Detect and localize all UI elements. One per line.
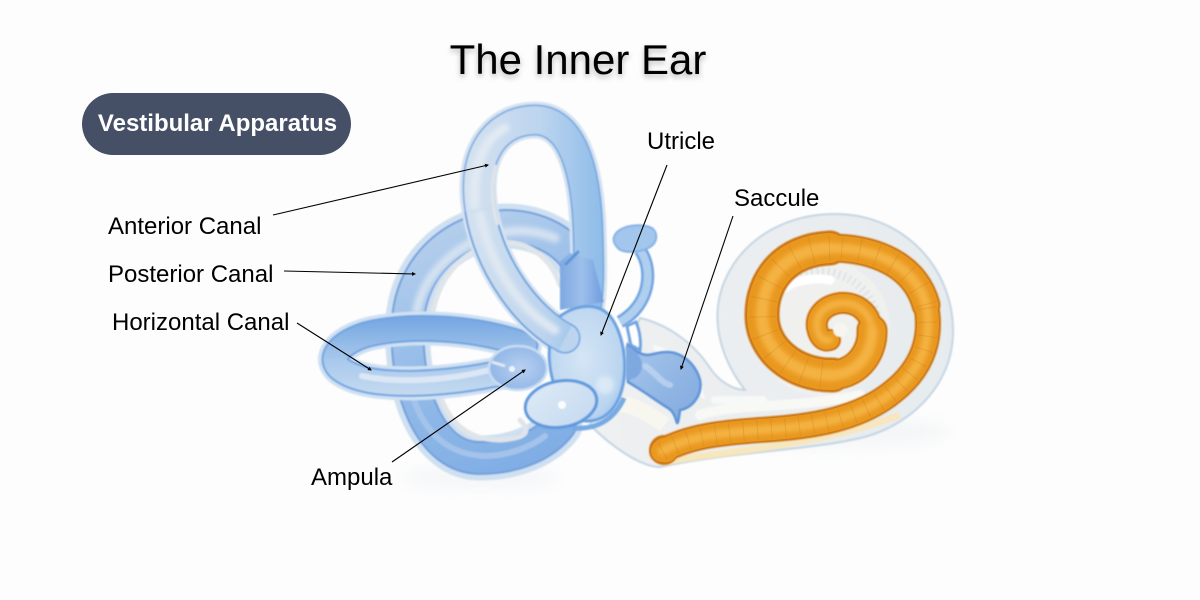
- leader arrow: utricle: [601, 165, 667, 335]
- label: horizontal canal: Horizontal Canal: [112, 309, 289, 336]
- saccule: [626, 322, 700, 423]
- cochlea centre space: [754, 260, 890, 396]
- utricle: [549, 306, 625, 428]
- cochlea orange spiral: [649, 248, 928, 465]
- anterior canal: limb overlapping utricle: [480, 165, 580, 354]
- anterior canal: loop and common crus: [474, 120, 604, 338]
- leader arrow: ampula: [392, 370, 525, 462]
- badge: vestibular apparatus: Vestibular Apparatus: [98, 110, 337, 137]
- label: utricle: Utricle: [647, 128, 715, 155]
- badge: vestibular apparatus: [82, 93, 351, 155]
- ampulla: horizontal: [489, 346, 547, 390]
- cochlea apex hole: [833, 323, 847, 337]
- leader arrow: horizontal canal: [297, 323, 371, 370]
- endolymphatic sac and duct: [614, 225, 656, 322]
- posterior canal: [408, 226, 578, 458]
- leader arrow: anterior canal: [273, 165, 488, 215]
- label: saccule: Saccule: [734, 185, 819, 212]
- ampulla: posterior: [522, 375, 600, 433]
- label: ampula: Ampula: [311, 464, 392, 491]
- leader arrow: posterior canal: [284, 271, 415, 274]
- title: The Inner Ear: [450, 36, 706, 83]
- label: posterior canal: Posterior Canal: [108, 261, 273, 288]
- horizontal canal: [335, 328, 525, 383]
- cochlea bony shell and vestibule connection: [590, 214, 953, 467]
- label: anterior canal: Anterior Canal: [108, 213, 261, 240]
- soft shadow under illustration: [400, 416, 950, 488]
- leader arrow: saccule: [681, 216, 733, 369]
